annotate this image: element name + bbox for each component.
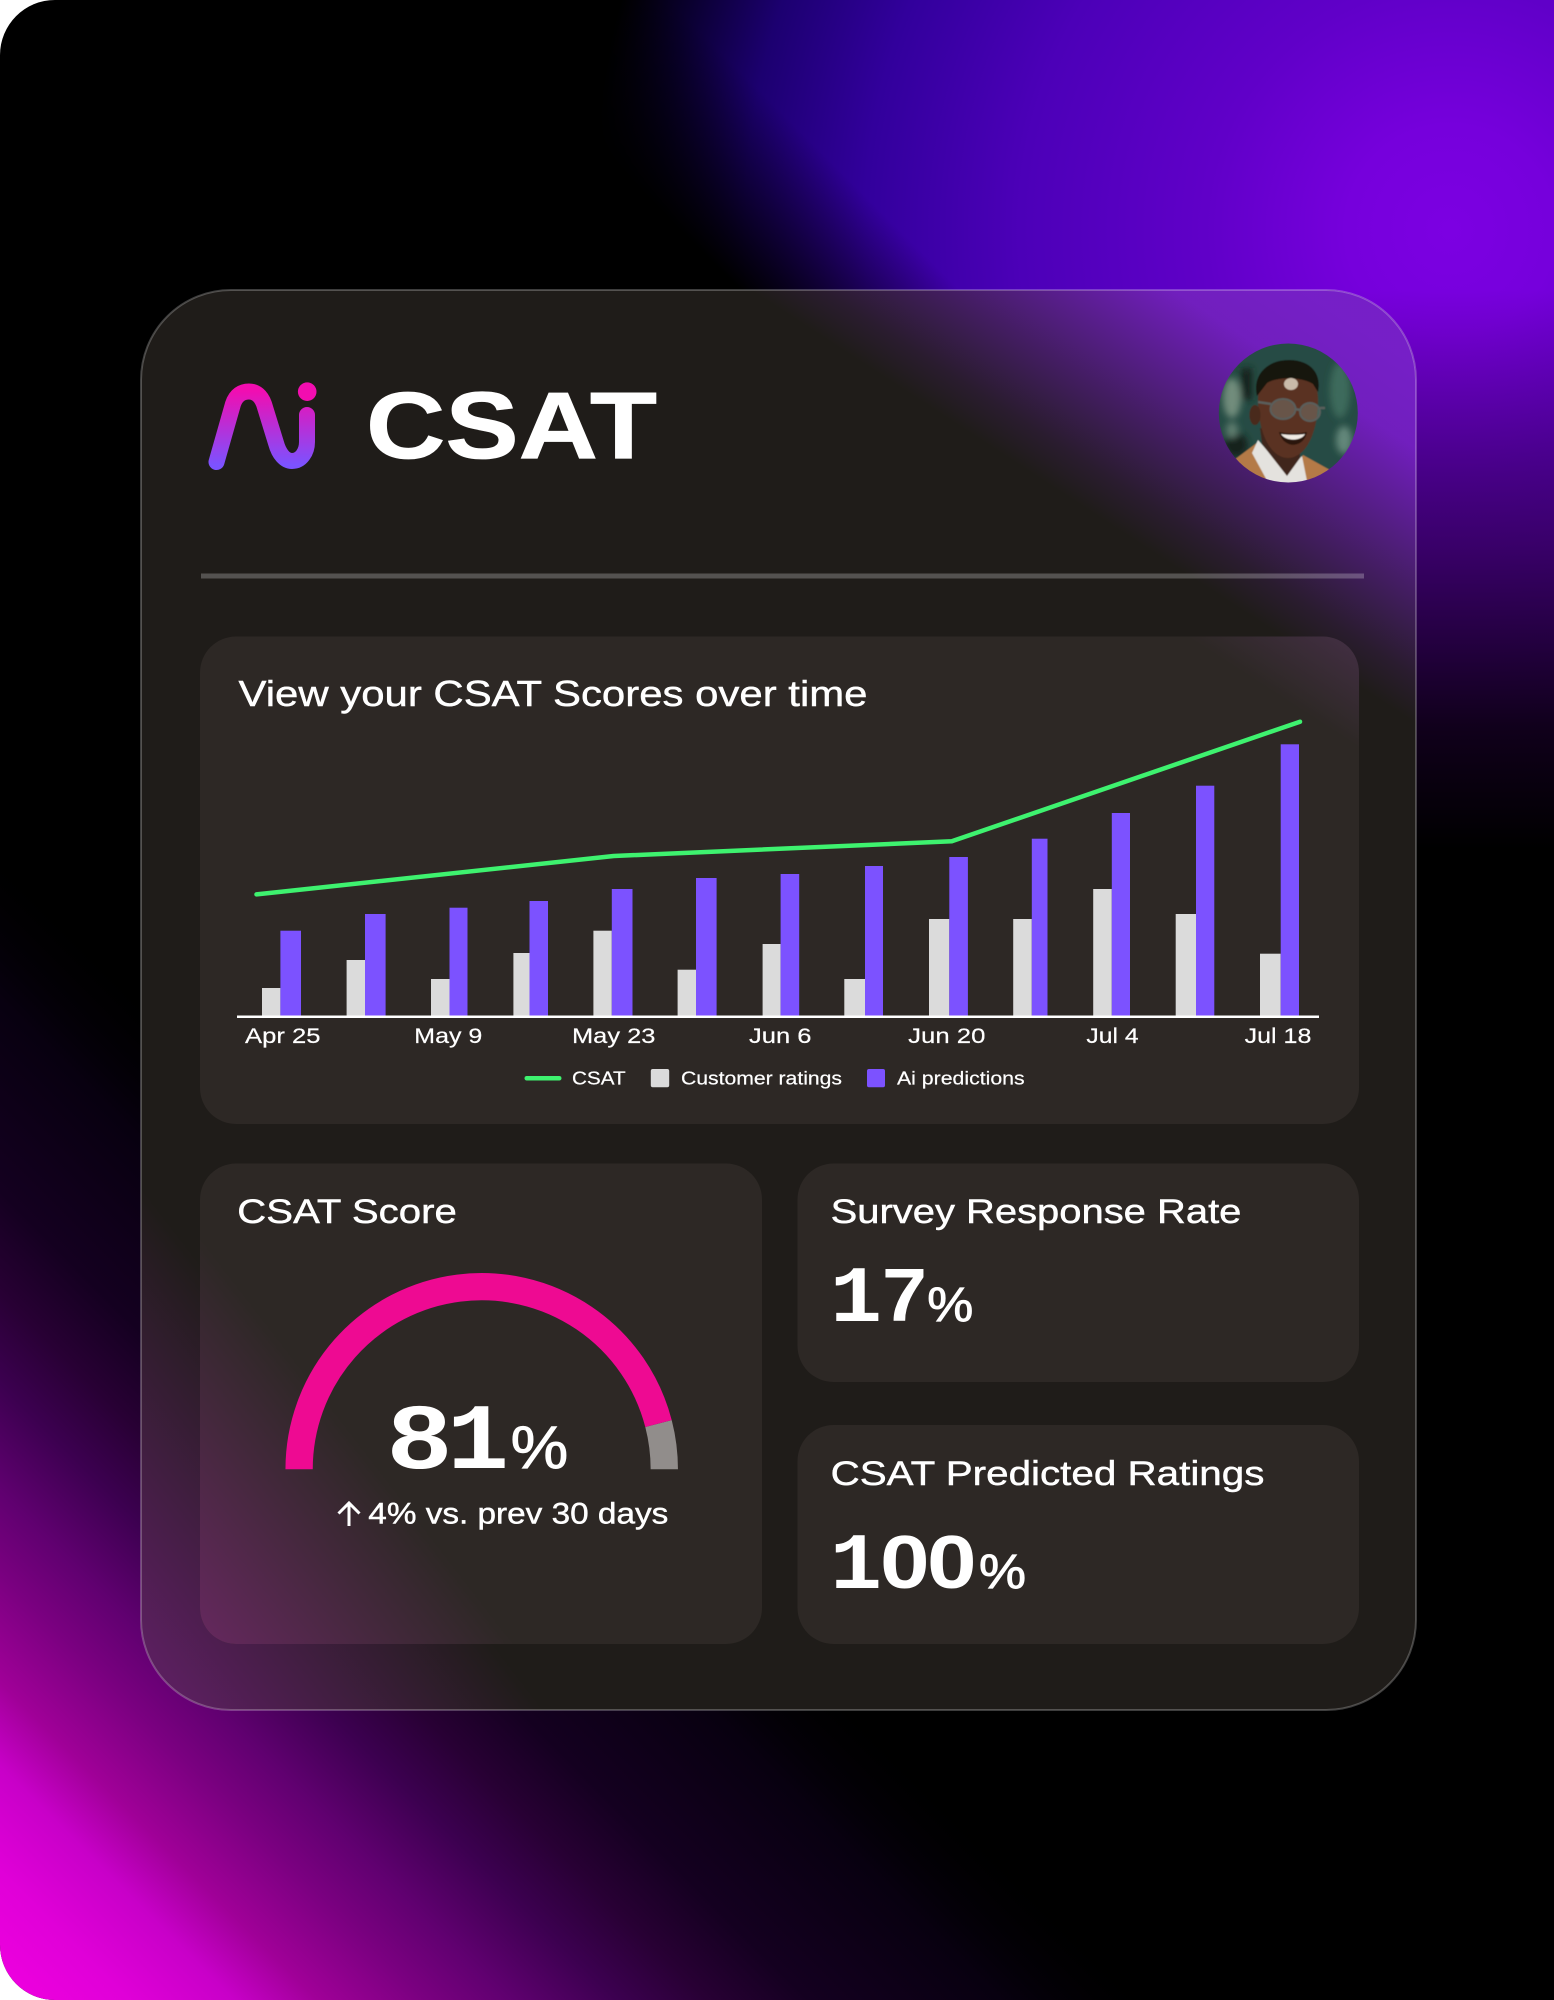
value [389, 1388, 568, 1497]
axis labels: Jun 20 [908, 1024, 985, 1048]
value: % [979, 1546, 1026, 1599]
panel: main card [141, 290, 1416, 1710]
heading: Survey Response Rate [831, 1193, 1241, 1231]
value: 1 [830, 1255, 882, 1346]
value: % [927, 1279, 973, 1332]
axis labels: Jul 4 [1086, 1024, 1139, 1048]
gauge arc [299, 1287, 664, 1469]
panel: CSAT predicted ratings [798, 1425, 1359, 1644]
axis labels: Jun 6 [749, 1024, 812, 1048]
trend note: 4% vs. prev 30 days [368, 1497, 668, 1530]
value: 1 [830, 1522, 882, 1613]
divider [201, 574, 1364, 578]
axis labels: Jul 18 [1245, 1024, 1311, 1048]
heading: CSAT Score [237, 1193, 457, 1231]
axis [237, 1016, 1319, 1018]
panel: survey response rate [798, 1164, 1359, 1382]
line: CSAT trend [256, 722, 1300, 894]
value [830, 1253, 973, 1346]
panel: CSAT scores over time chart [200, 636, 1359, 1124]
bar chart [262, 744, 1299, 1016]
value: 1 [447, 1391, 509, 1497]
panel: CSAT score gauge [200, 1164, 762, 1644]
value [830, 1520, 1026, 1613]
value: 7 [882, 1253, 927, 1337]
value: % [511, 1414, 568, 1481]
value: 0 [880, 1520, 930, 1604]
icon: user avatar [1218, 344, 1358, 482]
legend: Ai predictions [897, 1068, 1025, 1088]
icon: Ai logo [216, 382, 317, 462]
axis labels: May 23 [572, 1024, 655, 1048]
heading: CSAT Predicted Ratings [831, 1455, 1264, 1493]
legend [524, 1068, 1025, 1088]
legend: Customer ratings [681, 1068, 842, 1088]
axis labels: Apr 25 [245, 1024, 321, 1048]
title: CSAT [366, 373, 657, 479]
axis labels: May 9 [414, 1024, 482, 1048]
axis labels [245, 1024, 1311, 1048]
value: 0 [927, 1520, 977, 1604]
value: 8 [389, 1388, 450, 1487]
chart heading: View your CSAT Scores over time [238, 673, 868, 714]
legend: CSAT [572, 1068, 626, 1088]
